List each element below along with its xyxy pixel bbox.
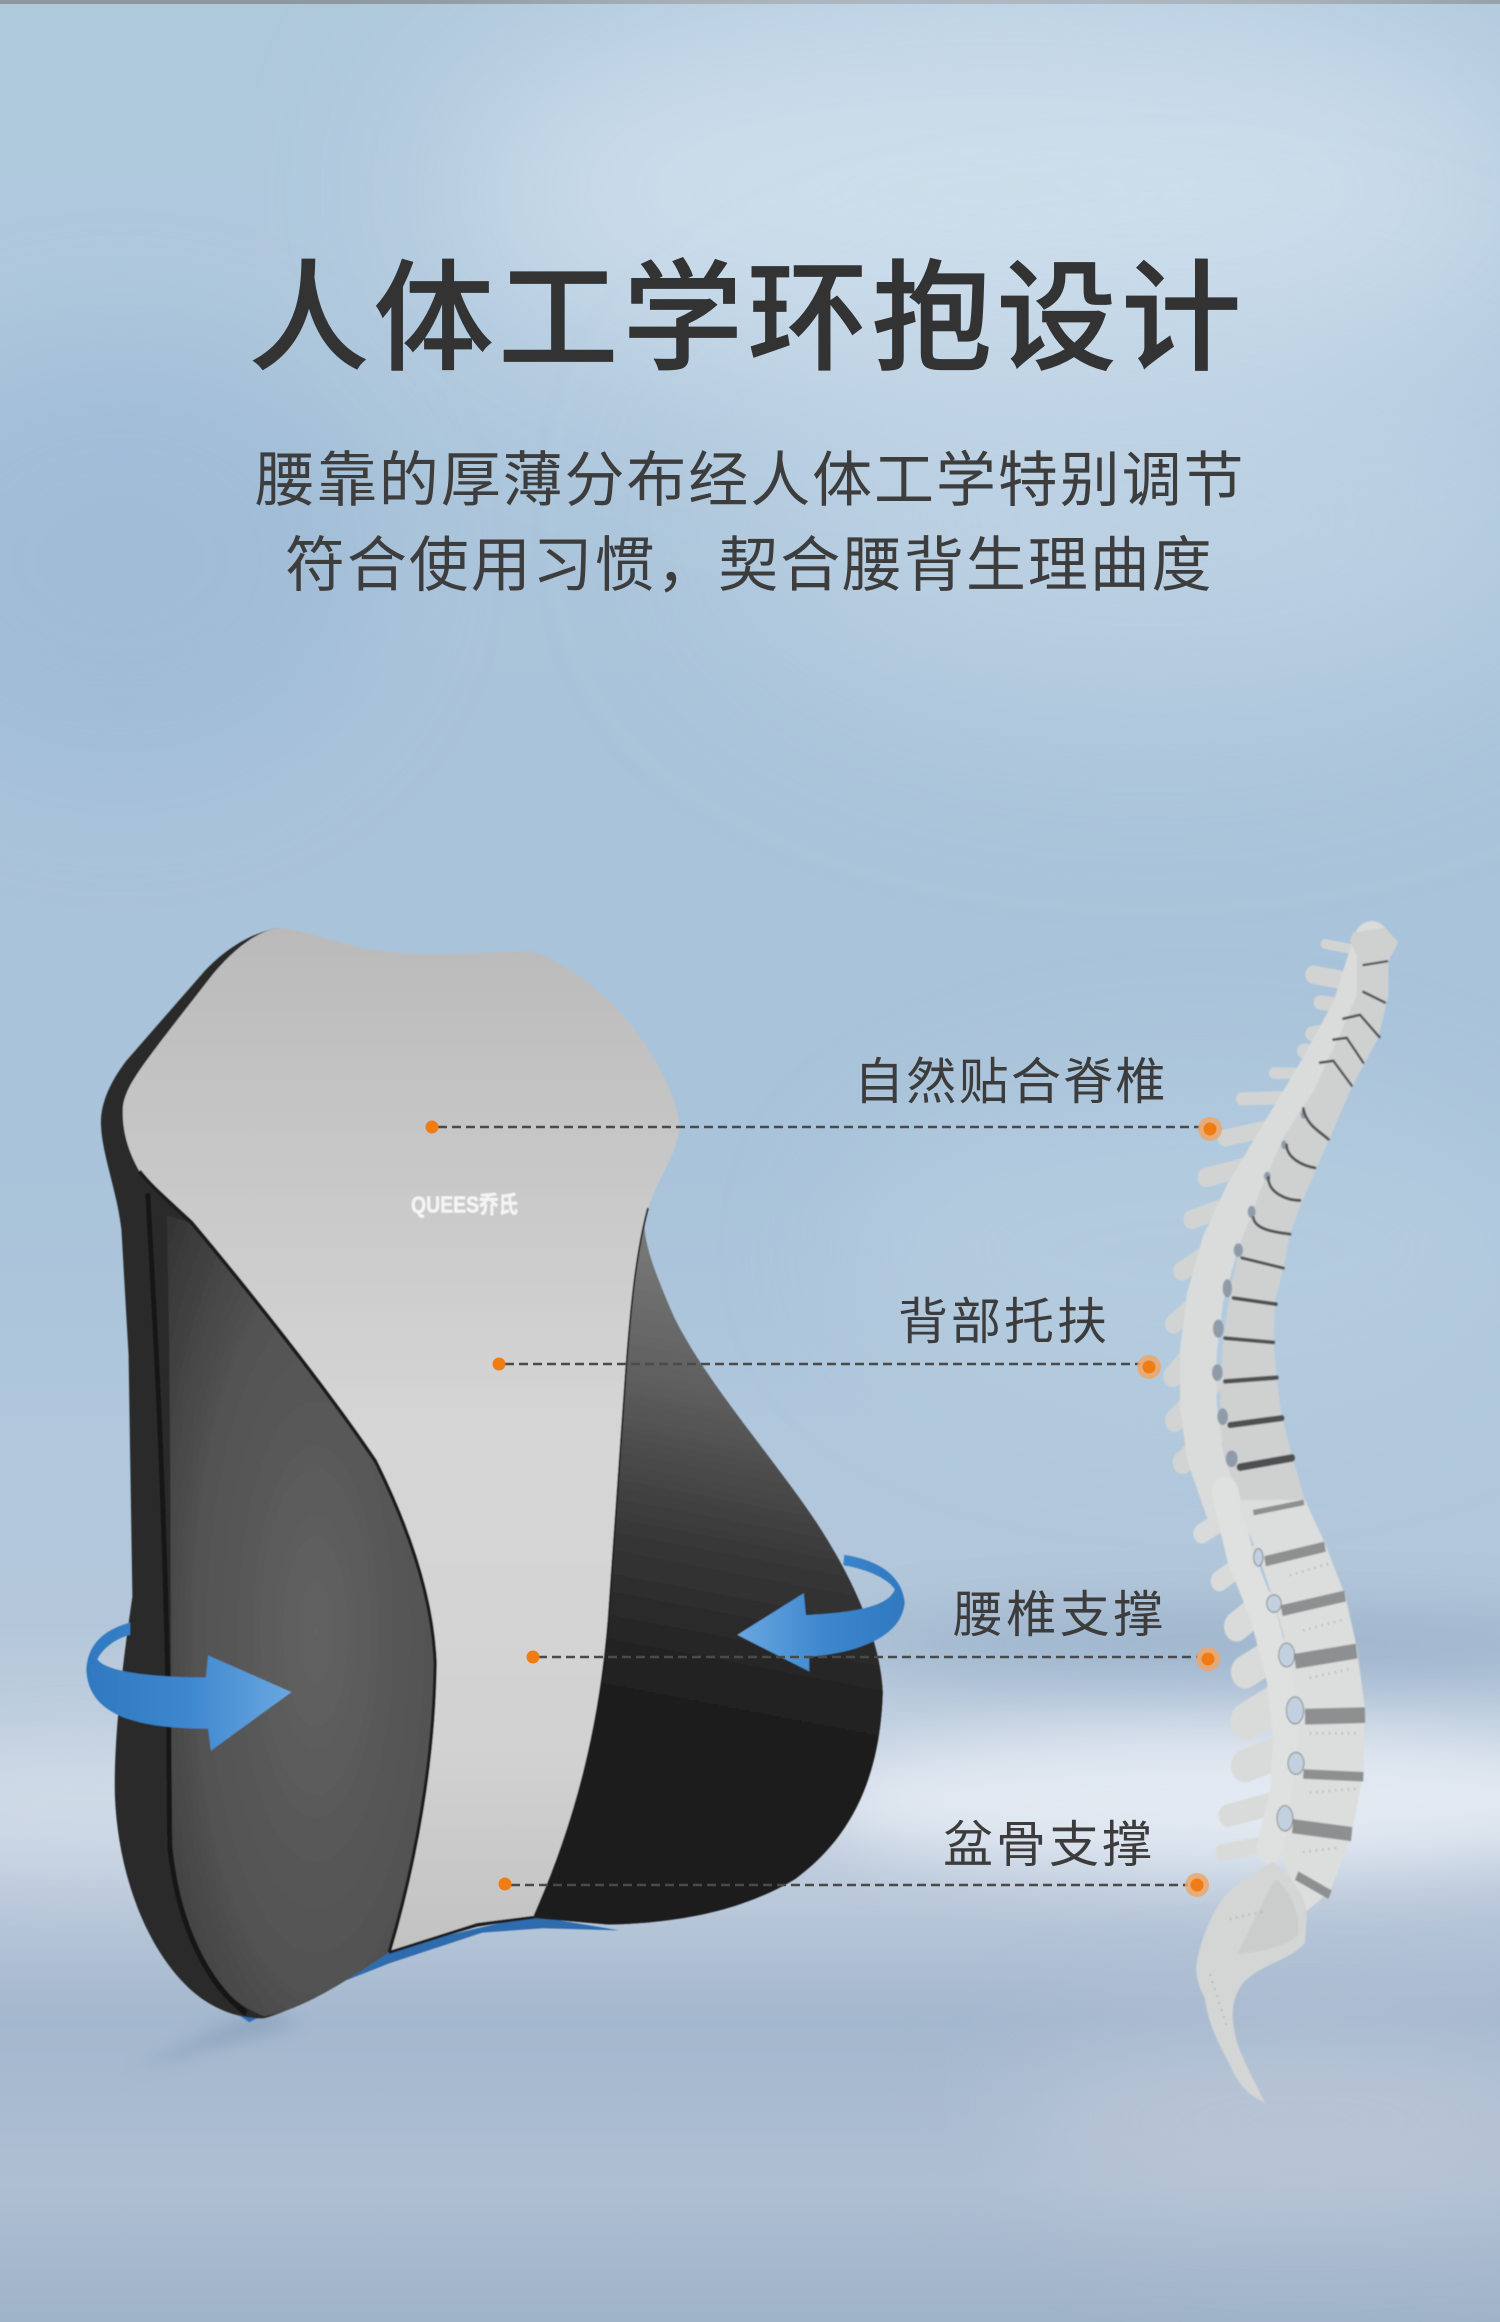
- subtitle: 腰靠的厚薄分布经人体工学特别调节: [255, 447, 1245, 514]
- spinous processes upper: [1173, 944, 1360, 1463]
- articular column lower: [1225, 1492, 1287, 1848]
- left seam: [148, 1193, 246, 2013]
- spinous processes lower: [1202, 1510, 1285, 1853]
- foramina lower: [1254, 1549, 1304, 1831]
- right wing: [534, 1223, 883, 1925]
- subtitle: [255, 447, 1245, 599]
- callout: 自然贴合脊椎: [426, 1054, 1222, 1141]
- spine: [1173, 928, 1398, 2103]
- title: 人体工学环抱设计: [249, 252, 1246, 386]
- subtitle: 符合使用习惯，契合腰背生理曲度: [285, 532, 1214, 599]
- pillow outer shell: [101, 928, 883, 2018]
- vertebral bodies lower: [1240, 1500, 1365, 1911]
- callout: 盆骨支撑: [498, 1817, 1209, 1897]
- callout: 背部托扶: 背部托扶: [898, 1294, 1110, 1350]
- foramina upper: [1212, 1110, 1306, 1467]
- lumbar vertebrae and sacrum: [1196, 1492, 1365, 2103]
- lumbar pillow: [86, 928, 905, 2022]
- sacrum: [1196, 1862, 1307, 2103]
- callout: 自然贴合脊椎: 自然贴合脊椎: [854, 1054, 1168, 1110]
- callout: 腰椎支撑: [526, 1587, 1220, 1671]
- right blue arrow: [737, 1555, 905, 1672]
- discs lower: [1253, 1502, 1365, 1895]
- left blue arrow: [86, 1622, 291, 1751]
- left side panel: [167, 1215, 437, 2016]
- articular column upper: [1198, 942, 1372, 1512]
- callout: 盆骨支撑: 盆骨支撑: [943, 1817, 1155, 1873]
- ground contact shadow: [222, 1916, 619, 2022]
- callout: 腰椎支撑: 腰椎支撑: [953, 1587, 1167, 1643]
- callout: 背部托扶: [492, 1294, 1161, 1379]
- cervical and thoracic vertebrae: [1173, 928, 1398, 1512]
- brand logo: QUEES乔氏: [411, 1192, 518, 1218]
- disc lines upper: [1225, 961, 1387, 1467]
- bone texture lower: [1210, 1563, 1360, 2026]
- panel seams: [140, 1171, 648, 1952]
- center light panel: [123, 928, 680, 1952]
- vertebral bodies upper: [1220, 928, 1398, 1500]
